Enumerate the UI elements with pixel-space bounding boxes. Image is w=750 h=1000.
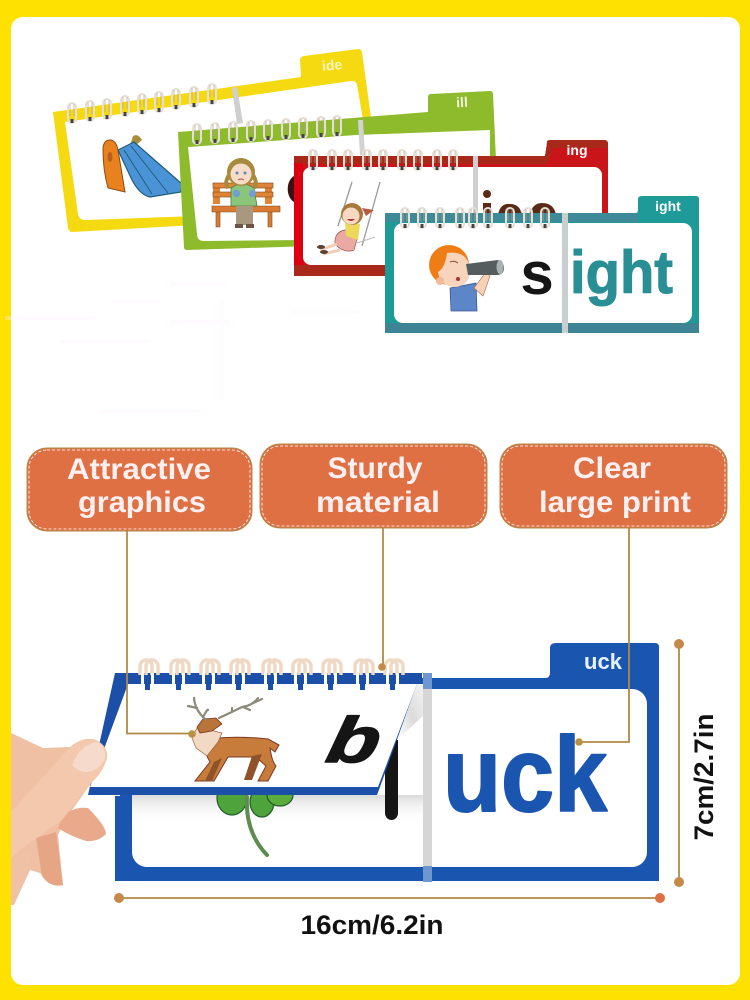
callout: Clear large print: large print (539, 486, 691, 519)
card: ight (teal) (385, 196, 699, 333)
tab label: ing: ing (566, 142, 588, 158)
width label: 16cm/6.2in (300, 910, 444, 940)
spiral coils (401, 208, 549, 228)
spiral coils (309, 150, 457, 170)
leader line: Attractive graphics (127, 531, 196, 738)
leader line: Sturdy material (378, 528, 386, 671)
binding strip (358, 120, 365, 155)
icon: clover (216, 795, 294, 858)
icon: girl on swing (317, 182, 380, 254)
binding strip (562, 213, 568, 333)
hand (11, 733, 107, 905)
tab label: ide: ide (321, 56, 343, 74)
flipped page (88, 660, 423, 795)
card: uck (blue) (115, 643, 659, 882)
width dimension line (114, 893, 665, 903)
word: uck: uck (443, 716, 608, 834)
height label: 7cm/2.7in (689, 714, 719, 840)
spiral coils (193, 116, 341, 144)
card: ing (red) (288, 140, 608, 276)
binding strip (473, 156, 478, 216)
letter stem under page (385, 740, 398, 820)
height dimension line (674, 639, 684, 887)
letter: b: b (321, 705, 388, 776)
icon: deer (188, 698, 279, 781)
icon: boy with binoculars (429, 245, 504, 311)
spiral coils (140, 660, 403, 690)
spiral coils (68, 84, 216, 123)
callout: Clear large print: Clear (573, 452, 651, 485)
icon: girl on bench (212, 158, 280, 228)
tab label: ight: ight (655, 198, 681, 214)
leader line: Clear large print (575, 528, 629, 746)
green card letter behind (288, 176, 294, 202)
tab label: uck: uck (584, 649, 623, 674)
binding strip (232, 87, 243, 124)
callout: Attractive graphics: graphics (78, 486, 206, 519)
word: s: s (520, 240, 554, 307)
callout: Sturdy material: Sturdy (328, 452, 423, 485)
icon: slide (103, 135, 182, 197)
tab label: ill: ill (456, 94, 468, 110)
callout: Clear large print (500, 444, 727, 528)
partial letters: ing (483, 190, 556, 215)
binding strip (423, 673, 432, 882)
callout: Attractive graphics: Attractive (67, 453, 211, 486)
callout: Attractive graphics (27, 448, 252, 531)
callout: Sturdy material: material (316, 486, 440, 519)
card: ill (green) (178, 91, 496, 250)
callout: Sturdy material (260, 444, 487, 528)
word: ight: ight (570, 239, 673, 306)
card: ide (yellow) (53, 49, 372, 232)
